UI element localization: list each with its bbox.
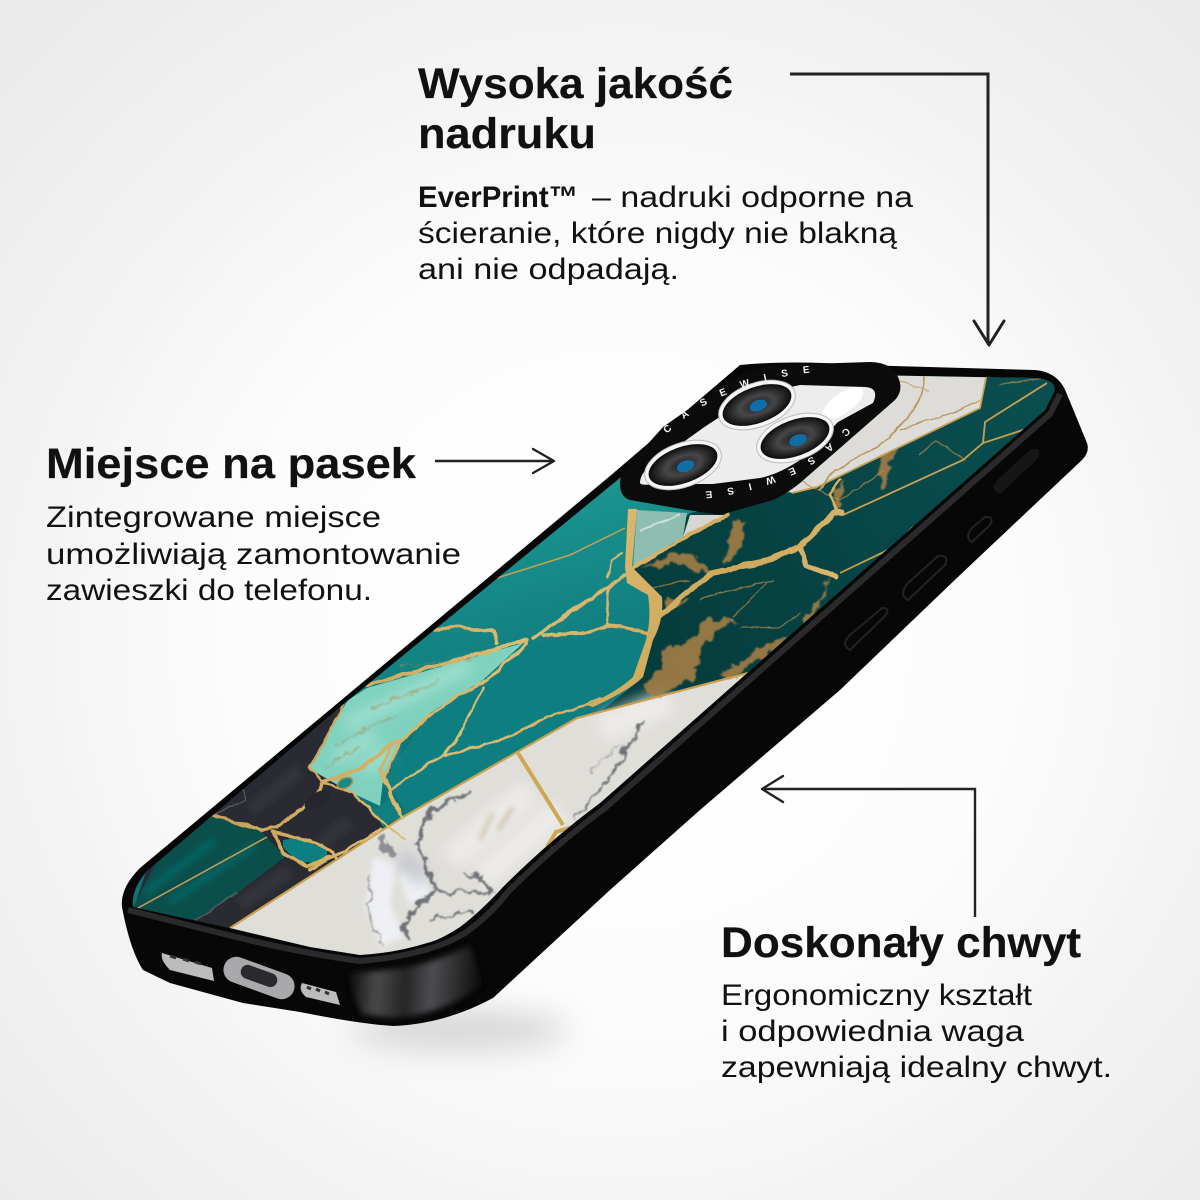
thick gold vein bbox=[587, 509, 662, 707]
lens top bbox=[712, 371, 802, 439]
slate marble base bbox=[133, 703, 403, 930]
heading: Miejsce na pasek bbox=[46, 440, 416, 488]
callout: print quality bbox=[418, 60, 913, 286]
body text bbox=[46, 501, 461, 607]
speaker grille left bbox=[162, 953, 214, 981]
body text: umożliwiają zamontowanie bbox=[46, 538, 461, 571]
gold veins bbox=[213, 480, 842, 870]
heading: nadruku bbox=[418, 110, 596, 158]
tan faint veins bbox=[480, 807, 513, 840]
thin dark-teal veins bbox=[640, 378, 1045, 627]
ring lettering top: CASEWISE bbox=[664, 366, 810, 432]
tan veins in upper white bbox=[640, 370, 980, 530]
gold speckle patches bbox=[640, 448, 900, 697]
body text bbox=[721, 979, 1112, 1084]
bluish marble zone bbox=[378, 860, 420, 942]
lens left bbox=[638, 431, 728, 499]
slate vein holes bbox=[304, 790, 322, 808]
body text: ścieranie, które nigdy nie blakną bbox=[418, 217, 897, 250]
camera opening bbox=[640, 385, 875, 485]
body text: – nadruki odporne na bbox=[592, 181, 913, 214]
inner rim bbox=[128, 394, 1060, 961]
dark teal marble bbox=[600, 373, 1060, 712]
phone shadow bbox=[350, 1010, 570, 1050]
body text: i odpowiednia waga bbox=[721, 1015, 1024, 1048]
heading bbox=[418, 60, 733, 158]
small teal insets bbox=[283, 838, 327, 863]
body text: Zintegrowane miejsce bbox=[46, 501, 381, 534]
white marble highlights bbox=[450, 700, 670, 880]
speaker grille right bbox=[301, 983, 340, 1005]
bottom reflective corner bbox=[350, 945, 482, 1018]
upper white marble bbox=[788, 376, 986, 493]
turquoise marble bbox=[308, 643, 523, 806]
body text: ani nie odpadają. bbox=[418, 253, 679, 286]
arrow: print quality bbox=[790, 74, 1004, 345]
heading: Doskonały chwyt bbox=[721, 919, 1081, 967]
callout: strap slot bbox=[46, 440, 461, 607]
body text: Ergonomiczny kształt bbox=[721, 979, 1033, 1012]
body text: zawieszki do telefonu. bbox=[46, 574, 372, 607]
charge port bbox=[220, 953, 298, 1003]
grey marble veins bbox=[370, 720, 645, 947]
camera island bbox=[620, 362, 900, 515]
heading: Wysoka jakość bbox=[418, 60, 733, 108]
camera frame bbox=[620, 362, 900, 515]
body text: zapewniają idealny chwyt. bbox=[721, 1051, 1112, 1084]
body text: EverPrint™ bbox=[418, 181, 578, 214]
base teal bbox=[132, 373, 1055, 955]
case body bbox=[122, 362, 1088, 1026]
lower white marble bbox=[228, 672, 752, 960]
arrow: perfect grip bbox=[762, 776, 975, 917]
lens right bbox=[750, 404, 840, 472]
volume buttons bbox=[845, 517, 992, 650]
camera highlight bbox=[818, 381, 868, 425]
side switch bbox=[997, 452, 1037, 490]
gold rod bbox=[518, 753, 573, 847]
slate texture bbox=[240, 770, 350, 905]
body text bbox=[418, 181, 913, 286]
dark teal lower-left marble bbox=[133, 815, 285, 922]
thin gold boundary lines bbox=[138, 373, 1047, 928]
pale green marble bbox=[633, 510, 687, 567]
callout: perfect grip bbox=[721, 919, 1112, 1084]
phone case bbox=[122, 362, 1088, 1026]
lower teal bbox=[386, 681, 626, 813]
back artwork bbox=[132, 373, 1055, 955]
ring lettering bottom: CASEWISE bbox=[706, 428, 850, 498]
grey slate veins bbox=[194, 789, 246, 920]
arrow: strap slot bbox=[435, 449, 554, 473]
